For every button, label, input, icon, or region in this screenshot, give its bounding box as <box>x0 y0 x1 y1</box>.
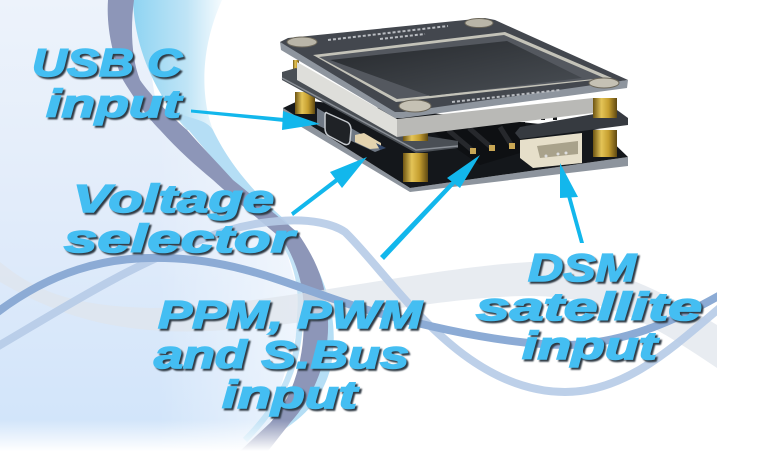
label: DSM satellite input: input <box>522 325 660 368</box>
bottom board <box>283 100 628 192</box>
label: DSM satellite input: satellite <box>476 286 702 329</box>
white JST connector <box>520 133 582 168</box>
small upper pins <box>531 110 555 120</box>
grey-violet curved band <box>108 0 328 451</box>
light blue curved sweep lower <box>184 116 334 428</box>
left pale blue panel <box>0 0 303 451</box>
label: PPM, PWM and S.Bus input: and S.Bus <box>154 334 409 377</box>
slide switch <box>355 133 386 150</box>
medium blue wave <box>0 258 722 345</box>
front gold standoffs <box>403 98 617 182</box>
bezel inner <box>319 35 604 99</box>
metal connector plate <box>317 108 385 152</box>
label: USB C input <box>32 42 184 126</box>
pin header <box>430 122 530 165</box>
label: PPM, PWM and S.Bus input: PPM, PWM <box>158 294 424 337</box>
top plate <box>280 18 628 118</box>
screws <box>287 18 619 112</box>
light blue wave <box>0 220 722 392</box>
bottom fade across the panel and band <box>0 422 292 451</box>
arrow: voltage selector <box>291 157 367 216</box>
inner sweep arc <box>245 240 301 440</box>
arrow: USB C input <box>191 110 320 130</box>
label: Voltage selector: selector <box>64 218 297 261</box>
pale grey wave <box>0 262 717 368</box>
label: Voltage selector <box>64 178 297 261</box>
middle board <box>282 68 628 153</box>
light blue curved sweep top <box>133 0 222 130</box>
label: USB C input: input <box>46 83 184 126</box>
display <box>330 41 582 96</box>
label: PPM, PWM and S.Bus input <box>154 294 424 417</box>
arrow: PPM PWM S.Bus <box>380 155 480 260</box>
rear gold standoffs <box>293 60 617 157</box>
arrow: DSM satellite <box>560 163 584 243</box>
label: DSM satellite input <box>476 247 702 368</box>
screen module side <box>297 62 593 137</box>
device: stacked circuit boards with screen <box>280 18 628 192</box>
label: Voltage selector: Voltage <box>73 178 274 221</box>
label: DSM satellite input: DSM <box>528 247 638 290</box>
screen bezel <box>313 32 612 102</box>
label: USB C input: USB C <box>32 42 183 85</box>
USB C port <box>325 112 351 145</box>
label: PPM, PWM and S.Bus input: input <box>222 374 360 417</box>
